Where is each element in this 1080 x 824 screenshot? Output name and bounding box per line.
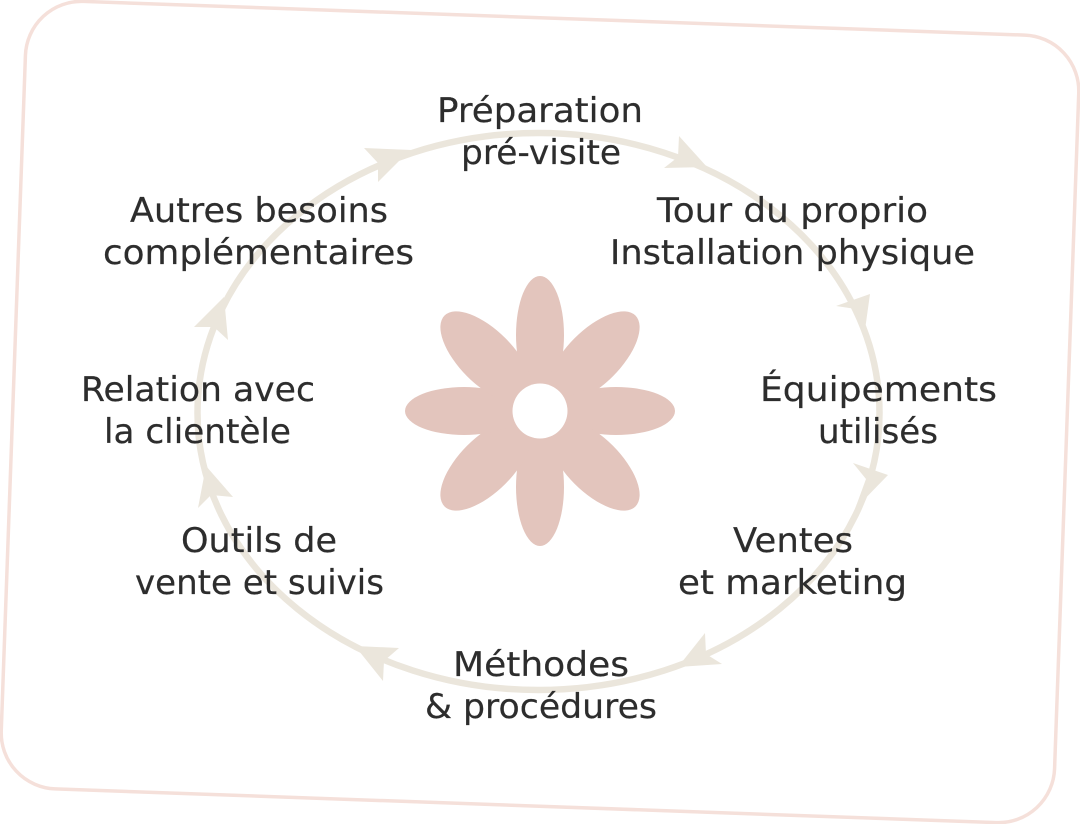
arrow: to ventes — [853, 463, 888, 509]
label: tour du proprio: Installation physique — [610, 233, 975, 273]
label: ventes et marketing: et marketing — [678, 563, 907, 603]
label: outils de vente et suivis: vente et suivis — [135, 563, 384, 603]
label: préparation pré-visite: Préparation — [437, 91, 643, 131]
label: méthodes & procédures — [425, 645, 657, 727]
arrow: to preparation — [364, 148, 412, 182]
label: équipements utilisés: utilisés — [818, 412, 938, 452]
ring — [198, 133, 880, 690]
label: outils de vente et suivis — [135, 521, 384, 603]
label: autres besoins complémentaires: complémentaires — [103, 233, 414, 273]
label: tour du proprio — [610, 191, 975, 273]
arrow: to outils — [355, 646, 399, 681]
label: équipements utilisés: Équipements — [760, 369, 997, 410]
label: ventes et marketing: Ventes — [733, 521, 853, 561]
label: autres besoins complémentaires: Autres besoins — [130, 191, 388, 231]
cycle ring with arrows — [194, 133, 888, 690]
label: relation avec la clientèle: Relation avec — [81, 370, 315, 410]
arrow: to tour du proprio — [664, 136, 707, 168]
icon: flower — [405, 276, 675, 546]
arrow: to equipements — [836, 294, 870, 337]
arrow: to relation — [198, 466, 233, 508]
label: outils de vente et suivis: Outils de — [181, 521, 337, 561]
arrow: to autres besoins — [194, 297, 228, 340]
arrow: to methodes — [678, 633, 722, 667]
label: ventes et marketing — [678, 521, 907, 603]
label: méthodes & procédures: Méthodes — [453, 645, 629, 685]
label: autres besoins complémentaires — [103, 191, 414, 273]
label: préparation pré-visite: pré-visite — [461, 133, 621, 173]
label: relation avec la clientèle — [81, 370, 315, 452]
label: méthodes & procédures: & procédures — [425, 687, 657, 727]
label: tour du proprio: Tour du proprio — [656, 191, 928, 231]
label: préparation pré-visite — [437, 91, 643, 173]
label: équipements utilisés — [760, 369, 997, 452]
label: relation avec la clientèle: la clientèle — [104, 412, 291, 452]
